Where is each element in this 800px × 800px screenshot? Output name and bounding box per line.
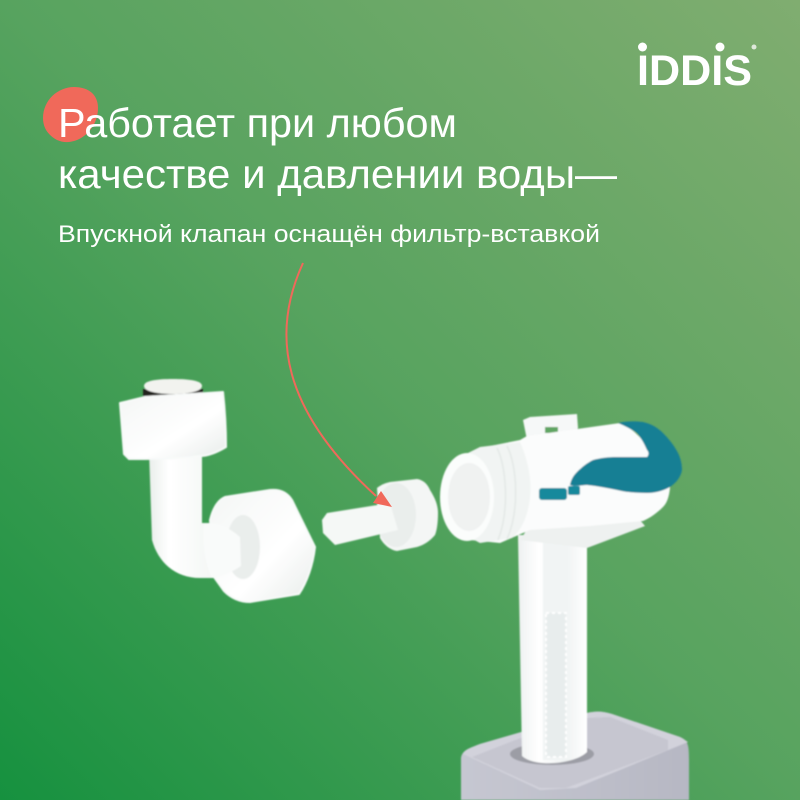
inlet ring <box>440 453 494 541</box>
subheading: Впускной клапан оснащён фильтр-вставкой <box>58 221 600 248</box>
base hole <box>510 743 594 765</box>
lower nut <box>210 490 315 602</box>
accent blob behind heading <box>43 87 98 142</box>
elbow tube <box>149 450 215 578</box>
upper nut <box>120 392 226 459</box>
main body <box>470 423 670 543</box>
blue handle <box>570 421 682 493</box>
valve <box>440 414 689 800</box>
inlet opening <box>448 463 490 531</box>
filter head <box>377 479 438 551</box>
elbow fitting <box>120 379 315 602</box>
arrow <box>286 263 392 507</box>
thread lines <box>497 446 516 540</box>
stem <box>518 535 587 763</box>
lower flange <box>520 510 645 548</box>
filter pin <box>322 503 398 545</box>
base rim <box>463 712 688 790</box>
threaded neck <box>462 442 531 543</box>
stem rib <box>543 470 568 760</box>
tube stub <box>203 523 241 578</box>
float base <box>461 712 689 800</box>
fitting cap and o-ring <box>143 379 203 399</box>
blue clip <box>539 486 580 500</box>
top clip <box>523 414 578 440</box>
heading <box>58 100 618 197</box>
filter insert <box>322 479 438 551</box>
logo: iDDIS: IDDIS <box>637 47 752 95</box>
base plate <box>472 717 668 788</box>
stem rack <box>546 613 566 757</box>
heading: качестве и давлении воды— <box>58 151 618 197</box>
heading: Работает при любом <box>58 100 457 146</box>
nut recess <box>226 515 260 579</box>
